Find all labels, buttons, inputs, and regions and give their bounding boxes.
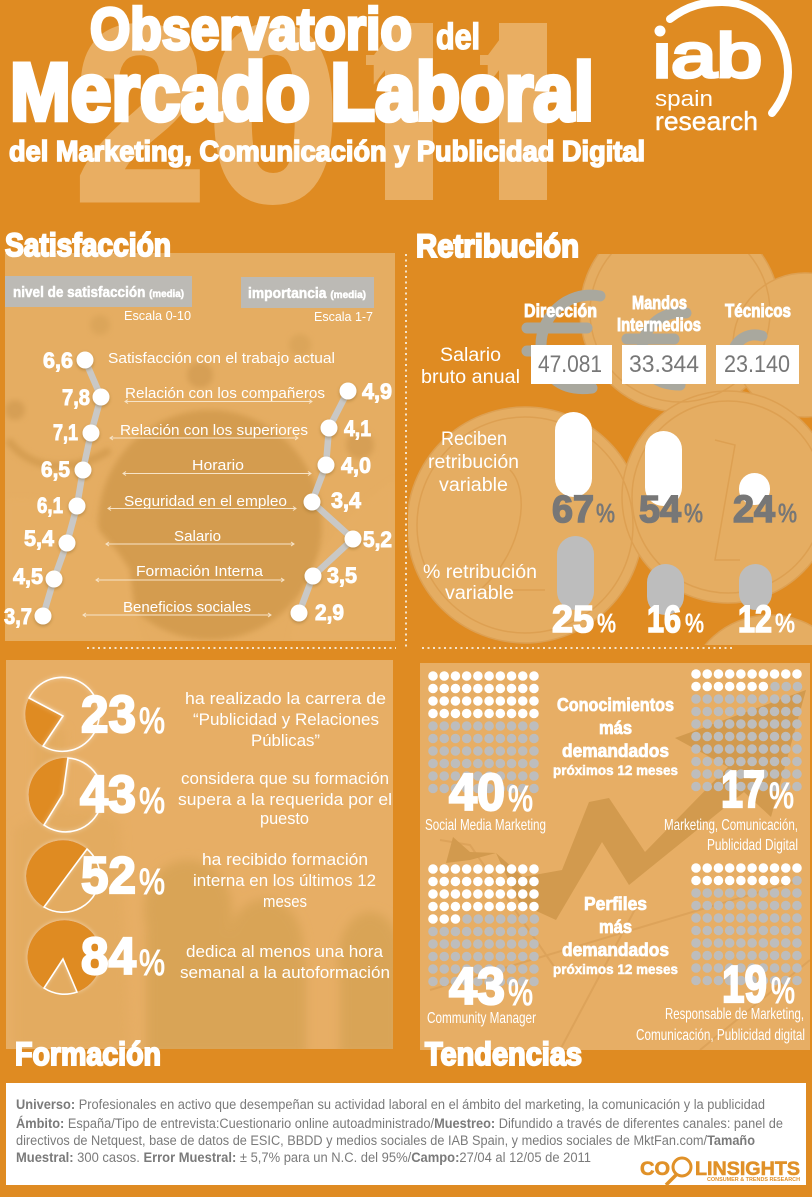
reciben retribución variable row: Reciben xyxy=(441,429,507,450)
pie: 43%: % xyxy=(139,780,165,821)
logo: coolinsights: CONSUMER & TRENDS RESEARCH xyxy=(707,1177,800,1183)
stat: 43%: Community Manager xyxy=(427,1010,536,1027)
% retribución variable row: variable xyxy=(445,583,514,604)
panel: retribución coins background xyxy=(408,254,812,645)
stat: 17%: % xyxy=(769,775,794,816)
line chart: nivel de satisfacción: 7,1 xyxy=(53,420,78,445)
line chart: importancia: 2,9 xyxy=(315,600,344,625)
% retribución variable row: 25 xyxy=(552,599,594,641)
pie: 43%: puesto xyxy=(260,809,309,828)
year watermark 2011 xyxy=(80,23,547,205)
legend: nivel de satisfacción: nivel de satisfacción (media) xyxy=(13,285,184,301)
pie: 23%: ha realizado la carrera de xyxy=(185,689,386,708)
pie: 52%: % xyxy=(139,861,165,902)
item labels with arrows xyxy=(83,350,335,617)
line chart: importancia: 4,9 xyxy=(362,379,392,404)
reciben retribución variable row: % xyxy=(684,498,703,528)
stat: 43%: 43 xyxy=(449,958,505,1016)
pie: 84%: % xyxy=(139,942,165,983)
reciben retribución variable row xyxy=(428,412,797,531)
centre label: perfiles más demandados: demandados xyxy=(562,940,669,960)
line chart: nivel de satisfacción: 5,4 xyxy=(24,526,55,551)
stat: 40% xyxy=(425,764,546,834)
centre label: conocimientos más demandados: Conocimientos xyxy=(557,695,674,715)
panel: formación xyxy=(6,660,402,1055)
column headers xyxy=(524,293,791,335)
methodology box: directivos de Netquest, base de datos de ESIC, BBDD y medios sociales de IAB Spain, y medios sociales de MktFan.com/Tamaño xyxy=(16,1133,755,1148)
pie: 23%: Públicas” xyxy=(251,731,320,750)
centre label: perfiles más demandados: próximos 12 meses xyxy=(553,961,678,977)
heading: formación: Formación xyxy=(15,1036,161,1072)
line chart: importancia: 3,4 xyxy=(331,488,362,513)
stat: 19%: % xyxy=(771,970,795,1011)
reciben retribución variable row: 54 xyxy=(639,489,681,531)
logo: iab spain research: research xyxy=(655,106,758,136)
pie: 52%: meses xyxy=(263,892,307,911)
item labels with arrows: Formación Interna xyxy=(136,563,264,580)
pie: 23%: % xyxy=(139,700,165,741)
centre label: conocimientos más demandados: próximos 12 meses xyxy=(553,762,678,778)
column headers: Intermedios xyxy=(617,315,701,335)
legend: importancia xyxy=(241,277,374,324)
dot matrix: 43% community manager xyxy=(433,869,535,982)
heading: satisfacción: Satisfacción xyxy=(5,227,171,263)
centre label: perfiles más demandados xyxy=(553,894,678,977)
item labels with arrows: Relación con los compañeros xyxy=(125,385,325,402)
stat: 17%: 17 xyxy=(721,761,765,819)
line chart: nivel de satisfacción: 4,5 xyxy=(13,564,43,589)
line chart: importancia: 4,0 xyxy=(341,453,371,478)
line chart: nivel de satisfacción: 7,8 xyxy=(62,385,90,410)
pie: 43%: considera que su formación xyxy=(181,769,389,788)
euro signs xyxy=(527,295,762,389)
pie: 84%: semanal a la autoformación xyxy=(180,963,390,982)
item labels with arrows: Salario xyxy=(174,528,221,545)
column headers: Técnicos xyxy=(725,301,791,321)
% retribución variable row: % xyxy=(775,608,795,638)
stat: 19% xyxy=(636,956,805,1044)
salario bruto anual row: 23.140 xyxy=(724,351,790,378)
pie: 84%: 84 xyxy=(81,928,136,986)
stat: 40%: 40 xyxy=(449,764,505,822)
pie: 43% xyxy=(29,758,392,832)
stat: 43% xyxy=(427,958,536,1027)
stat: 40%: % xyxy=(508,778,533,819)
salario bruto anual row: bruto anual xyxy=(421,367,520,388)
pie: 52% xyxy=(26,840,376,912)
reciben retribución variable row: variable xyxy=(439,475,508,496)
logo: iab spain research xyxy=(650,2,788,136)
line chart: nivel de satisfacción: 3,7 xyxy=(4,604,32,629)
stat: 17% xyxy=(664,761,798,854)
salario bruto anual row xyxy=(421,345,799,388)
logo: iab spain research: spain xyxy=(655,86,713,111)
centre label: conocimientos más demandados xyxy=(553,695,678,778)
pie: 23%: 23 xyxy=(81,686,136,744)
stat: 40%: Social Media Marketing xyxy=(425,817,546,834)
legend: importancia: Escala 1-7 xyxy=(314,310,373,324)
item labels with arrows: Relación con los superiores xyxy=(120,422,308,439)
reciben retribución variable row: retribución xyxy=(428,452,519,473)
% retribución variable row: 16 xyxy=(647,599,681,641)
legend: nivel de satisfacción: Escala 0-10 xyxy=(124,309,191,323)
% retribución variable row: % xyxy=(685,608,704,638)
pie: 43%: supera a la requerida por el xyxy=(178,790,392,809)
dot matrix: 19% responsable xyxy=(696,868,798,980)
pie: 52%: 52 xyxy=(81,847,136,905)
pie: 23%: “Publicidad y Relaciones xyxy=(193,710,379,729)
panel: satisfacción xyxy=(5,253,395,641)
line chart: nivel de satisfacción xyxy=(4,348,110,629)
panel: tendencias xyxy=(420,663,810,1050)
line chart: nivel de satisfacción: 6,5 xyxy=(41,457,70,482)
pie: 52%: interna en los últimos 12 xyxy=(193,871,376,890)
title: del Marketing, Comunicación y Publicidad Digital xyxy=(9,136,645,168)
centre label: conocimientos más demandados: más xyxy=(599,718,632,738)
% retribución variable row: % xyxy=(597,608,616,638)
centre label: conocimientos más demandados: demandados xyxy=(562,741,669,761)
column headers: Mandos xyxy=(632,293,687,313)
line chart: importancia: 3,5 xyxy=(327,563,357,588)
% retribución variable row: 12 xyxy=(738,599,772,641)
methodology box xyxy=(6,1083,806,1185)
pie: 23% xyxy=(25,677,386,751)
legend: nivel de satisfacción xyxy=(5,276,192,323)
centre label: perfiles más demandados: más xyxy=(599,917,632,937)
logo: coolinsights: CO xyxy=(640,1159,670,1180)
line chart: nivel de satisfacción: 6,6 xyxy=(43,348,73,373)
stat: 19%: 19 xyxy=(722,956,767,1014)
reciben retribución variable row: % xyxy=(596,498,615,528)
reciben retribución variable row: 67 xyxy=(552,489,594,531)
methodology box: Muestral: 300 casos. Error Muestral: ± 5,7% para un N.C. del 95%/Campo:27/04 al 12/05 de 2011 xyxy=(16,1150,591,1165)
salario bruto anual row: 33.344 xyxy=(629,351,699,378)
line chart: nivel de satisfacción: 6,1 xyxy=(37,493,63,518)
title xyxy=(9,0,645,168)
heading: tendencias: Tendencias xyxy=(425,1036,582,1072)
logo: coolinsights: LINSIGHTS xyxy=(695,1159,800,1180)
line chart: importancia: 4,1 xyxy=(344,416,371,441)
centre label: perfiles más demandados: Perfiles xyxy=(584,894,647,914)
dot matrix: 17% marketing xyxy=(696,674,798,786)
title: del xyxy=(436,16,480,57)
line chart: importancia xyxy=(290,379,392,625)
reciben retribución variable row: % xyxy=(778,498,797,528)
pie: 84% xyxy=(27,920,390,994)
pie: 52%: ha recibido formación xyxy=(202,850,368,869)
pie: 84%: dedica al menos una hora xyxy=(186,942,384,961)
% retribución variable row xyxy=(423,536,795,641)
item labels with arrows: Satisfacción con el trabajo actual xyxy=(108,350,335,367)
methodology box: Ámbito: España/Tipo de entrevista:Cuestionario online autoadministrado/Muestreo: Difundido a través de diferentes canales: panel de xyxy=(16,1116,783,1131)
reciben retribución variable row: 24 xyxy=(733,489,775,531)
dot matrix: 40% social media marketing xyxy=(433,676,535,788)
title: Mercado Laboral xyxy=(10,47,594,138)
logo: iab spain research: iab xyxy=(653,22,762,91)
heading: retribución: Retribución xyxy=(416,228,579,264)
pie: 43%: 43 xyxy=(80,766,136,824)
stat: 43%: % xyxy=(508,972,533,1013)
column headers: Dirección xyxy=(524,301,597,321)
line chart: importancia: 5,2 xyxy=(363,527,392,552)
item labels with arrows: Horario xyxy=(192,457,244,474)
methodology box: Universo: Profesionales en activo que desempeñan su actividad laboral en el ámbito del marketing, la comunicación y la publicidad xyxy=(16,1097,765,1112)
logo: coolinsights xyxy=(640,1158,800,1185)
salario bruto anual row: 47.081 xyxy=(538,351,602,378)
salario bruto anual row: Salario xyxy=(440,345,501,366)
legend: importancia: importancia (media) xyxy=(248,286,366,302)
% retribución variable row: % retribución xyxy=(423,562,537,583)
item labels with arrows: Beneficios sociales xyxy=(123,599,251,616)
item labels with arrows: Seguridad en el empleo xyxy=(124,493,287,510)
